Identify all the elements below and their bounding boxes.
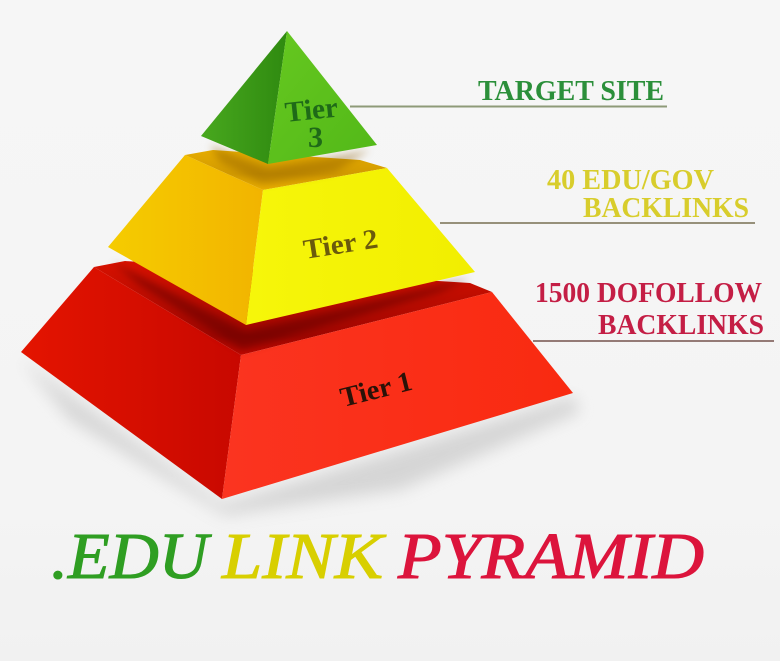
callout: dofollow backlinks: 1500 DOFOLLOW	[535, 278, 762, 309]
tier 3 label: Tier	[283, 92, 340, 129]
title: PYRAMID	[397, 520, 704, 593]
callout: edu/gov backlinks: BACKLINKS	[583, 193, 749, 224]
callout: edu/gov backlinks: 40 EDU/GOV	[547, 165, 714, 196]
tier 2 shadow on tier 1	[112, 262, 470, 350]
tier 1 red block	[21, 261, 573, 499]
tier 3 green pyramid	[201, 31, 377, 164]
tier 2 yellow block	[108, 150, 475, 325]
title: .EDU	[51, 520, 212, 593]
title	[51, 520, 704, 593]
tier 1 label: Tier 1	[337, 366, 416, 414]
callout: edu/gov backlinks	[440, 165, 755, 224]
pyramid ground shadow	[20, 358, 580, 515]
pyramid	[20, 31, 580, 515]
callout: dofollow backlinks	[533, 278, 774, 342]
tier 2 label: Tier 2	[301, 224, 380, 266]
tier 3 shadow on tier 2	[210, 145, 370, 184]
callout: dofollow backlinks: BACKLINKS	[598, 310, 764, 341]
tier 3 green pyramid: 3	[308, 121, 323, 154]
title: LINK	[221, 520, 386, 593]
callout: target site: TARGET SITE	[478, 76, 664, 107]
